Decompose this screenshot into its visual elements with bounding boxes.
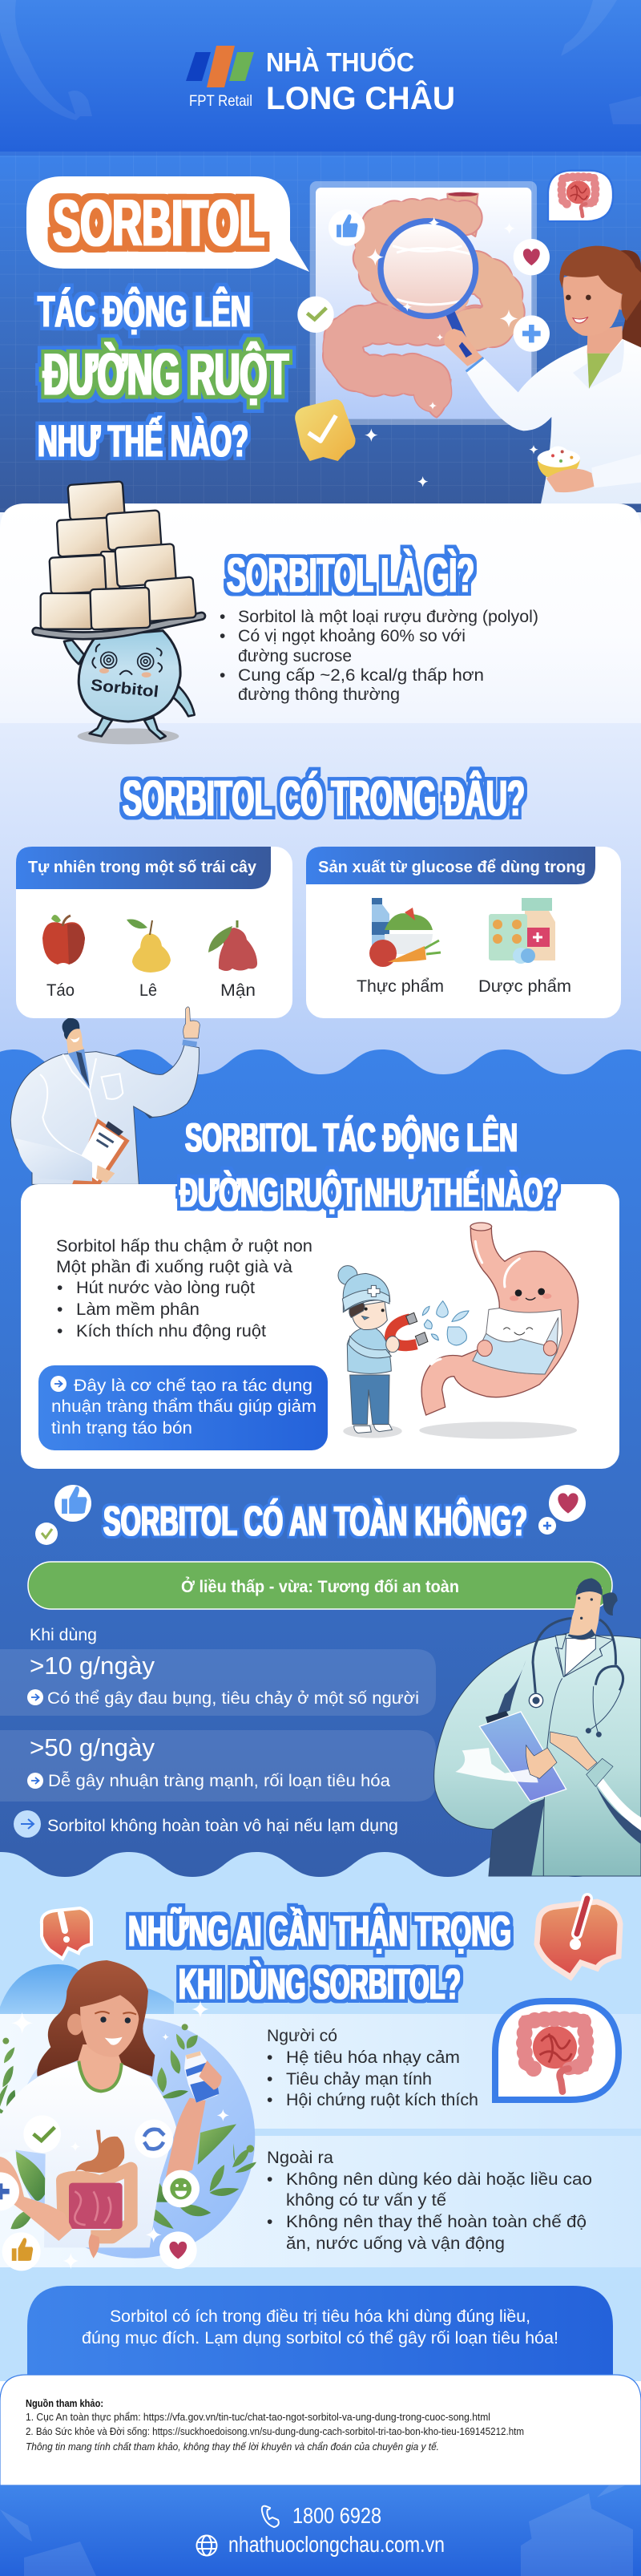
decor: storefront watermark [0,2485,633,2576]
text block: definition bullets [220,608,538,704]
stomach hands [478,1341,557,1357]
text block: people at risk: Tiêu chảy mạn tính [286,2070,432,2089]
text block: people at risk: Hệ tiêu hóa nhạy cảm [286,2048,460,2067]
icon: heart [514,239,550,275]
woman: hair back [617,250,641,350]
icon: rose apple [208,920,257,971]
callout: conclusion: Sorbitol có ích trong điều trị tiêu hóa khi dùng đúng liều, [110,2307,530,2326]
label: Dược phẩm: Dược phẩm [478,977,571,996]
icon: heart [159,2231,197,2269]
pillow [473,1308,562,1374]
tray [36,616,202,636]
light lower background wave [0,1852,641,2381]
text block: people at risk: • [267,2091,272,2109]
phone: 1800 6928 [292,2503,381,2528]
stethoscope [529,1618,623,1737]
text block: mechanism list: • [57,1322,62,1341]
coat shadow [32,1096,176,1184]
text block: definition bullets: Sorbitol là một loại rượu đường (polyol) [238,608,538,626]
header band [0,0,641,152]
speech bubble: SORBITOL: SORBITOL [53,187,264,260]
blue cap behind woman [0,1964,174,2014]
coat seam [543,1678,562,1876]
resting hand and arm [0,2157,72,2241]
text block: additional advice: • [267,2170,272,2189]
yogurt cup [538,447,641,492]
callout: osmotic laxative effect: Đây là cơ chế tạo ra tác dụng [74,1377,312,1395]
title: ĐƯỜNG RUỘT: ĐƯỜNG RUỘT [43,342,288,407]
text block: definition bullets: đường thông thường [238,685,400,704]
card: manufactured [306,847,621,1018]
icon: plus [0,2172,19,2210]
shirt [0,2062,176,2247]
woman: face [562,273,631,336]
text block: additional advice: • [267,2213,272,2231]
stomach [421,1223,579,1415]
text block: people at risk: • [267,2070,272,2089]
text block: people at risk: • [267,2048,272,2067]
text block: mechanism list: Sorbitol hấp thu chậm ở ruột non [56,1237,312,1256]
right hand and cuff [550,1732,613,1786]
phone [262,2503,381,2528]
panel: references: Thông tin mang tính chất tham khảo, không thay thế lời khuyên và chẩn đoán của chuyên gia y tế. [26,2441,439,2453]
icon: apple [42,915,85,964]
panel: references: 2. Báo Sức khỏe và Đời sống: https://suckhoedoisong.vn/su-dung-dung-cach-sorbitol-tri-tao-bon-kho-tieu-169145212.htm [26,2425,524,2437]
banner: low to moderate dose: Ở liều thấp - vừa: Tương đối an toàn [181,1577,459,1596]
tab: natural fruits [16,847,271,889]
heading: SORBITOL LÀ GÌ?: SORBITOL LÀ GÌ? [227,548,474,602]
text block: mechanism list: Một phần đi xuống ruột già và [56,1258,292,1276]
illustration: doctor pointing up [10,1007,200,1184]
note: not harmless if abused: Sorbitol không hoàn toàn vô hại nếu lạm dụng [47,1817,398,1835]
callout: conclusion [27,2286,613,2397]
mascot body [79,631,180,722]
icon: plus [514,315,550,352]
hair [37,1960,155,2077]
panel: over 50 g per day: Dễ gây nhuận tràng mạnh, rối loạn tiêu hóa [48,1772,390,1790]
panel: references: 1. Cục An toàn thực phẩm: https://vfa.gov.vn/tin-tuc/chat-tao-ngot-sorbitol-va-ung-dung-trong-cuoc-song.html [26,2411,490,2423]
title: TÁC ĐỘNG LÊN: TÁC ĐỘNG LÊN [38,286,251,336]
callout: osmotic laxative effect: nhuận tràng thẩm thấu giúp giảm [51,1397,316,1416]
icon: pharmaceuticals [489,898,555,964]
brand name: LONG CHÂU [266,79,455,116]
panel: references [0,2375,641,2485]
text block: additional advice: Không nên thay thế hoàn toàn chế độ [286,2213,587,2231]
coat [434,1633,641,1876]
illustration: doctor examining intestine [295,171,641,503]
text block: mechanism list: Kích thích nhu động ruột [76,1322,266,1341]
text block: additional advice: không có tư vấn y tế [286,2191,446,2210]
text block: definition bullets: đường sucrose [238,647,352,665]
mascot limbs [64,640,195,739]
panel: over 10 g per day: >10 g/ngày [30,1652,155,1680]
pointing hand [182,1007,200,1047]
text block: mechanism list [56,1237,312,1341]
leaves [0,2034,256,2229]
neck [78,2044,122,2091]
head [567,1578,618,1640]
magnet [390,1312,428,1346]
bottle [184,2051,222,2103]
mascot face [92,644,162,677]
panel: over 50 g per day: >50 g/ngày [30,1733,155,1761]
panel: over 50 g per day [0,1730,436,1802]
shirt and collar [555,1634,613,1677]
panel: references: Nguồn tham khảo: [26,2397,103,2409]
text block: additional advice [267,2149,592,2253]
title: NHƯ THẾ NÀO?: NHƯ THẾ NÀO? [38,415,248,466]
hand on clipboard [526,1745,557,1778]
shirt collar [79,2061,122,2091]
clipboard [16,1118,130,1184]
illustration: woman with digestive system [0,1960,256,2271]
woman: hair [559,246,641,321]
stomach face [510,1288,551,1301]
brand name: NHÀ THUỐC [266,47,414,77]
icon: thumb [2,2232,41,2271]
label: Táo: Táo [46,981,75,1000]
mascot label: Sorbitol [90,677,159,702]
speech bubble: SORBITOL [26,176,309,272]
illustration: sorbitol mascot carrying sugar cubes [36,481,202,744]
woman: hand and magnifier grip [444,329,483,371]
icon: smile [162,2170,200,2207]
coat details [40,1054,123,1160]
boy [338,1266,399,1433]
card: mechanism [21,1184,619,1469]
shadow [78,728,179,744]
callout: osmotic laxative effect [38,1365,328,1450]
brand name [266,47,455,116]
blue circle [14,2018,255,2259]
intestine bubble [548,171,613,221]
gradient band [0,2014,641,2267]
intestine bubble [495,2001,619,2100]
icon: food [369,898,441,967]
water drops [422,1301,469,1345]
footer [0,2485,641,2576]
panel: blue mechanism and safety section [0,1049,641,1880]
text block: people at risk: Người có [267,2027,337,2045]
woman: neck [587,326,623,354]
woman: lapels [573,339,624,389]
panel: caution section [0,1964,641,2267]
illustration: doctor with stethoscope [434,1578,641,1876]
coat [10,1045,199,1184]
text block: additional advice: Ngoài ra [267,2149,333,2167]
label: Mận: Mận [220,981,256,1000]
text block: mechanism list: Hút nước vào lòng ruột [76,1279,255,1297]
callout: osmotic laxative effect: tình trạng táo bón [51,1419,192,1438]
tab: produced from glucose: Sản xuất từ glucose để dùng trong [318,859,586,876]
tab: natural fruits: Tự nhiên trong một số trái cây [28,859,257,876]
icon: refresh [135,2120,173,2158]
digestive system [62,2130,131,2259]
text block: mechanism list: • [57,1279,62,1297]
text block: additional advice: Không nên dùng kéo dài hoặc liều cao [286,2170,592,2189]
illustration: boy with magnet and stomach [338,1223,579,1439]
logo: FPT Retail: FPT Retail [189,93,252,110]
clipboard [479,1711,566,1802]
logo: FPT Retail [186,46,254,110]
card: fruits [16,847,292,1018]
sparkles [11,2000,229,2269]
text block: mechanism list: Làm mềm phân [76,1300,200,1319]
icon: check [23,2115,61,2153]
icon: pear [127,919,171,973]
heading: KHI DÙNG SORBITOL?: KHI DÙNG SORBITOL? [179,1960,461,2008]
text block: people at risk [267,2027,478,2109]
text block: additional advice: ăn, nước uống và vận động [286,2234,505,2253]
label: Khi dùng: Khi dùng [30,1626,97,1644]
shirt and tie [67,1049,90,1089]
panel: over 10 g per day [0,1649,436,1716]
face [67,1995,139,2057]
text block: definition bullets: • [220,666,225,685]
text block: definition bullets: Cung cấp ~2,6 kcal/g thấp hơn [238,666,484,685]
raised arm [166,2098,206,2178]
sugar cubes [41,481,196,629]
text block: mechanism list: • [57,1300,62,1319]
hero panel [0,152,641,512]
text block: definition bullets: Có vị ngọt khoảng 60% so với [238,627,466,645]
arm highlight [455,1748,538,1782]
divider band [0,2129,641,2136]
large intestine [342,192,503,418]
woman: coat and arm [466,339,641,503]
text block: definition bullets: • [220,627,225,645]
magnifier [381,221,476,354]
callout: conclusion: đúng mục đích. Lạm dụng sorbitol có thể gây rối loạn tiêu hóa! [82,2329,558,2348]
tab: produced from glucose [306,847,595,884]
banner: low to moderate dose [28,1562,612,1609]
panel: over 10 g per day: Có thể gây đau bụng, tiêu chảy ở một số người [47,1689,419,1708]
note: not harmless if abused [14,1810,398,1838]
sparkles [365,216,538,487]
icons: around safety heading [35,1485,586,1545]
text block: people at risk: Hội chứng ruột kích thích [286,2091,478,2109]
head [62,1018,84,1053]
page background: light section [0,497,641,1090]
website: nhathuoclongchau.com.vn [228,2532,445,2557]
panel: sorbitol là gì [0,481,641,744]
icons: alert right [537,1899,620,1977]
pillow face [503,1328,533,1335]
icon: yellow check tile [295,399,356,461]
shadows [343,1421,577,1439]
label: Lê: Lê [139,981,157,1000]
label: Thực phẩm: Thực phẩm [357,977,444,996]
woman: shirt [587,354,611,389]
text block: definition bullets: • [220,608,225,626]
icon: thumbs up [329,209,365,246]
tablet screen [310,181,537,425]
coat shadows [489,1660,641,1876]
icons: alert left [42,1908,91,1959]
icon: check [297,297,334,333]
